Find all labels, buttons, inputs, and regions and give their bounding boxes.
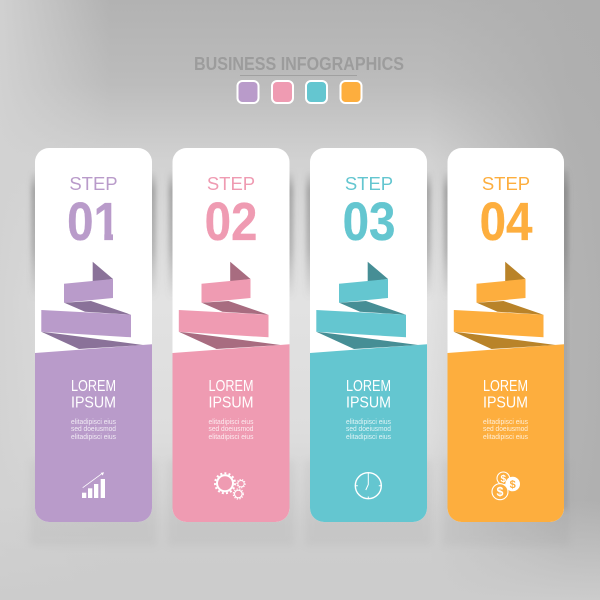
card body [172, 148, 290, 522]
body text: LOREM [208, 378, 254, 395]
card body [448, 148, 564, 522]
body text: sed doeiusmod [483, 426, 528, 433]
body text: elitadipisci eius [483, 434, 528, 441]
body text: sed doeiusmod [71, 426, 116, 433]
title: BUSINESS INFOGRAPHICS [194, 54, 404, 74]
body text: LOREM [346, 378, 391, 395]
legend swatches [238, 81, 362, 103]
icon: dollar coins [492, 472, 520, 500]
step label: STEP [345, 173, 393, 194]
icon: bar chart [82, 472, 105, 498]
body text: elitadipisci eius [346, 419, 391, 426]
icon: dollar coins: $ [497, 485, 504, 499]
card body [35, 148, 152, 522]
body text [208, 378, 254, 441]
ribbon [316, 262, 418, 349]
step label: STEP [69, 173, 118, 194]
panel: step 02 [172, 148, 290, 522]
panel: step 03 [310, 148, 427, 522]
icon: gears [215, 473, 245, 499]
body text: elitadipisci eius [346, 434, 391, 441]
body text: IPSUM [483, 394, 528, 412]
step number: 01 [67, 191, 120, 252]
ribbon [41, 262, 143, 349]
step number: 03 [343, 191, 395, 252]
body text: sed doeiusmod [208, 426, 254, 433]
step number: 02 [205, 191, 257, 252]
body text [483, 378, 528, 441]
body text: elitadipisci eius [208, 419, 254, 426]
step label: STEP [207, 173, 255, 194]
icon: clock [355, 473, 381, 499]
card body [310, 148, 427, 522]
step number: 04 [480, 191, 533, 252]
body text [71, 378, 116, 441]
body text: IPSUM [208, 394, 254, 412]
panel: step 04 [448, 148, 564, 522]
body text: sed doeiusmod [346, 426, 391, 433]
panel: step 01 [35, 148, 152, 522]
body text: elitadipisci eius [71, 419, 116, 426]
body text: elitadipisci eius [71, 434, 116, 441]
body text [346, 378, 391, 441]
body text: elitadipisci eius [208, 434, 254, 441]
ribbon [454, 262, 556, 349]
body text: IPSUM [346, 394, 391, 412]
step label: STEP [482, 173, 530, 194]
icon: dollar coins: $ [510, 479, 516, 491]
body text: LOREM [71, 378, 116, 395]
body text: IPSUM [71, 394, 116, 412]
body text: elitadipisci eius [483, 419, 528, 426]
icon: dollar coins: $ [501, 474, 507, 485]
body text: LOREM [483, 378, 528, 395]
ribbon [179, 262, 280, 349]
